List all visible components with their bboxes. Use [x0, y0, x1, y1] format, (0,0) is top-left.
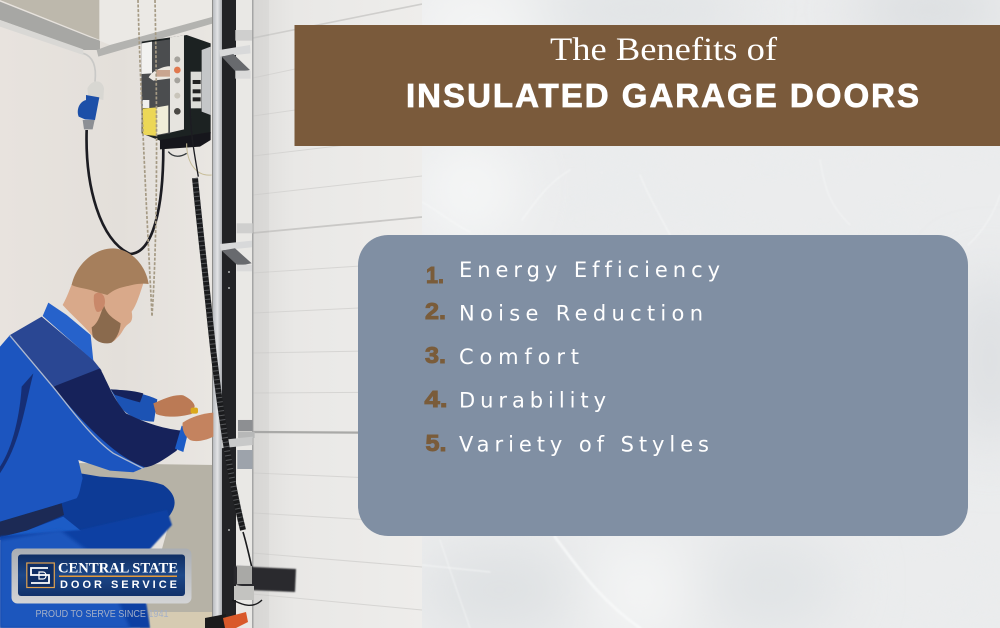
item 3: [425, 342, 579, 369]
hands: [153, 395, 195, 417]
item 2: Noise Reduction: [459, 302, 703, 326]
item 1: Energy Efficiency: [459, 258, 720, 282]
garage door panels: [253, 0, 422, 628]
control box: [142, 35, 212, 177]
logo plate: [12, 548, 192, 604]
head and neck: [63, 277, 143, 343]
belt: [0, 503, 64, 537]
icon: power plug and cable: [78, 53, 163, 254]
logo: Central State Door Service: DOOR SERVICE: [60, 579, 177, 591]
beard: [92, 305, 121, 343]
logo: Central State Door Service: [12, 548, 192, 620]
item 5: Variety of Styles: [459, 432, 709, 456]
upper arm and sleeve: [53, 368, 183, 467]
torso shade: [0, 373, 33, 473]
trousers: [0, 473, 175, 540]
far arm: [111, 389, 157, 422]
ear: [94, 293, 105, 312]
shoulder yoke: [10, 317, 102, 387]
ceiling and beams: [0, 0, 213, 57]
torso: [0, 335, 145, 523]
marble background: [410, 0, 1000, 628]
hanging chains: [138, 0, 157, 316]
item 5: 5.: [426, 430, 446, 456]
cuff: [175, 426, 187, 452]
item 1: 1.: [426, 262, 444, 288]
photo: technician installing garage door: [0, 0, 422, 628]
title line 2: INSULATED GARAGE DOORS: [406, 77, 919, 114]
logo tagline: PROUD TO SERVE SINCE 1941: [36, 608, 169, 620]
screwdriver: [191, 408, 198, 414]
metal kick plate and floor: [75, 463, 215, 628]
lower legs: [0, 510, 172, 628]
track brackets: [219, 30, 255, 469]
collar: [43, 303, 93, 361]
panel: benefits list: [358, 235, 968, 536]
junction box and orange tool: [205, 566, 296, 628]
logo name: CENTRAL STATE: [58, 560, 178, 576]
item 3: Comfort: [459, 345, 579, 369]
item 2: 2.: [425, 298, 446, 324]
logo icon: [27, 563, 54, 588]
technician: [0, 248, 213, 540]
back wall: [0, 0, 212, 548]
item 4: 4.: [424, 386, 448, 412]
lower body: [0, 516, 80, 540]
title banner: [294, 25, 1000, 146]
coiled cable: [195, 178, 262, 605]
item 3: 3.: [425, 342, 446, 368]
title line 1: The Benefits of: [550, 32, 777, 68]
item 4: Durability: [459, 388, 606, 412]
door track: [212, 0, 254, 628]
hair: [72, 248, 149, 295]
